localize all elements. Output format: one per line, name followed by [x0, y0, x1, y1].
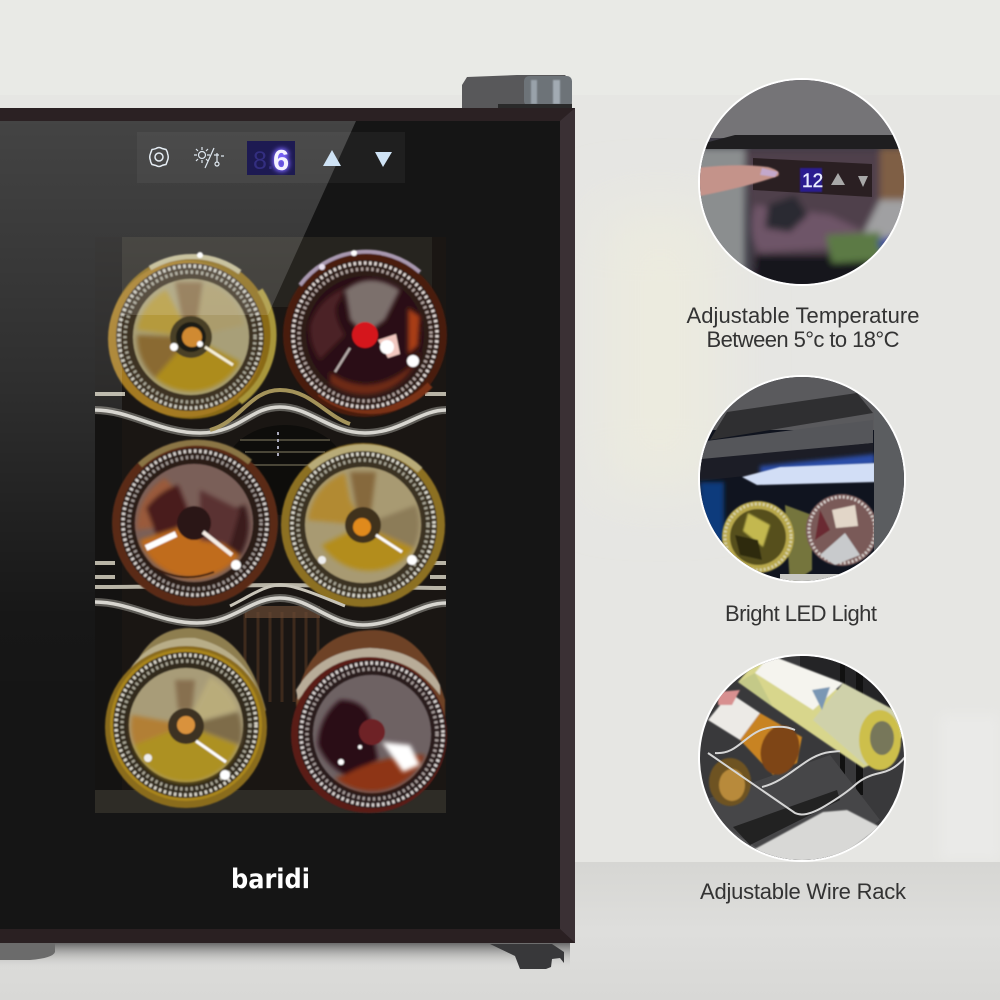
temperature display: 6 [273, 145, 289, 177]
circle: wire rack photo [698, 654, 906, 862]
caption: LED light: Bright LED Light [725, 601, 877, 626]
fridge cabinet [0, 108, 575, 943]
circle: temperature control photo [698, 78, 906, 286]
bottle: white wine bottom left [105, 628, 267, 808]
caption: temperature: Between 5°c to 18°C [706, 327, 900, 352]
caption: temperature: Adjustable Temperature [686, 303, 920, 328]
glass door [0, 121, 560, 929]
temperature display [247, 141, 295, 177]
bottle: amber wine middle left [112, 440, 278, 606]
circle: LED light photo [698, 375, 906, 583]
caption: wire rack: Adjustable Wire Rack [700, 879, 907, 904]
temperature display: 6 [273, 145, 289, 177]
glass reflection [0, 121, 356, 700]
caption: temperature [686, 303, 920, 352]
lower wire rack [95, 585, 446, 625]
window interior [95, 237, 446, 813]
icon: up arrow [323, 150, 341, 166]
upper wire rack [95, 390, 446, 433]
circle: temperature control photo: 12 [802, 171, 823, 192]
bottle: white wine top left [108, 252, 274, 419]
icon: light and temperature [194, 147, 224, 168]
rear bottle and grille [225, 425, 345, 702]
bottle: rose wine bottom right [291, 630, 447, 813]
feet [0, 942, 564, 969]
temperature display: 8. [253, 147, 274, 175]
countertop [0, 862, 1000, 1000]
wire rack [708, 727, 905, 814]
icon: settings gear [150, 148, 168, 166]
logo: baridi [231, 864, 310, 895]
bottle: rose wine top right [283, 250, 447, 417]
control panel [137, 132, 405, 183]
bottle: white wine middle right [281, 443, 445, 607]
back wires [95, 394, 446, 588]
icon: down arrow [375, 152, 392, 167]
main bottle [738, 655, 902, 770]
top handle [462, 75, 572, 108]
small bottles [708, 690, 805, 806]
